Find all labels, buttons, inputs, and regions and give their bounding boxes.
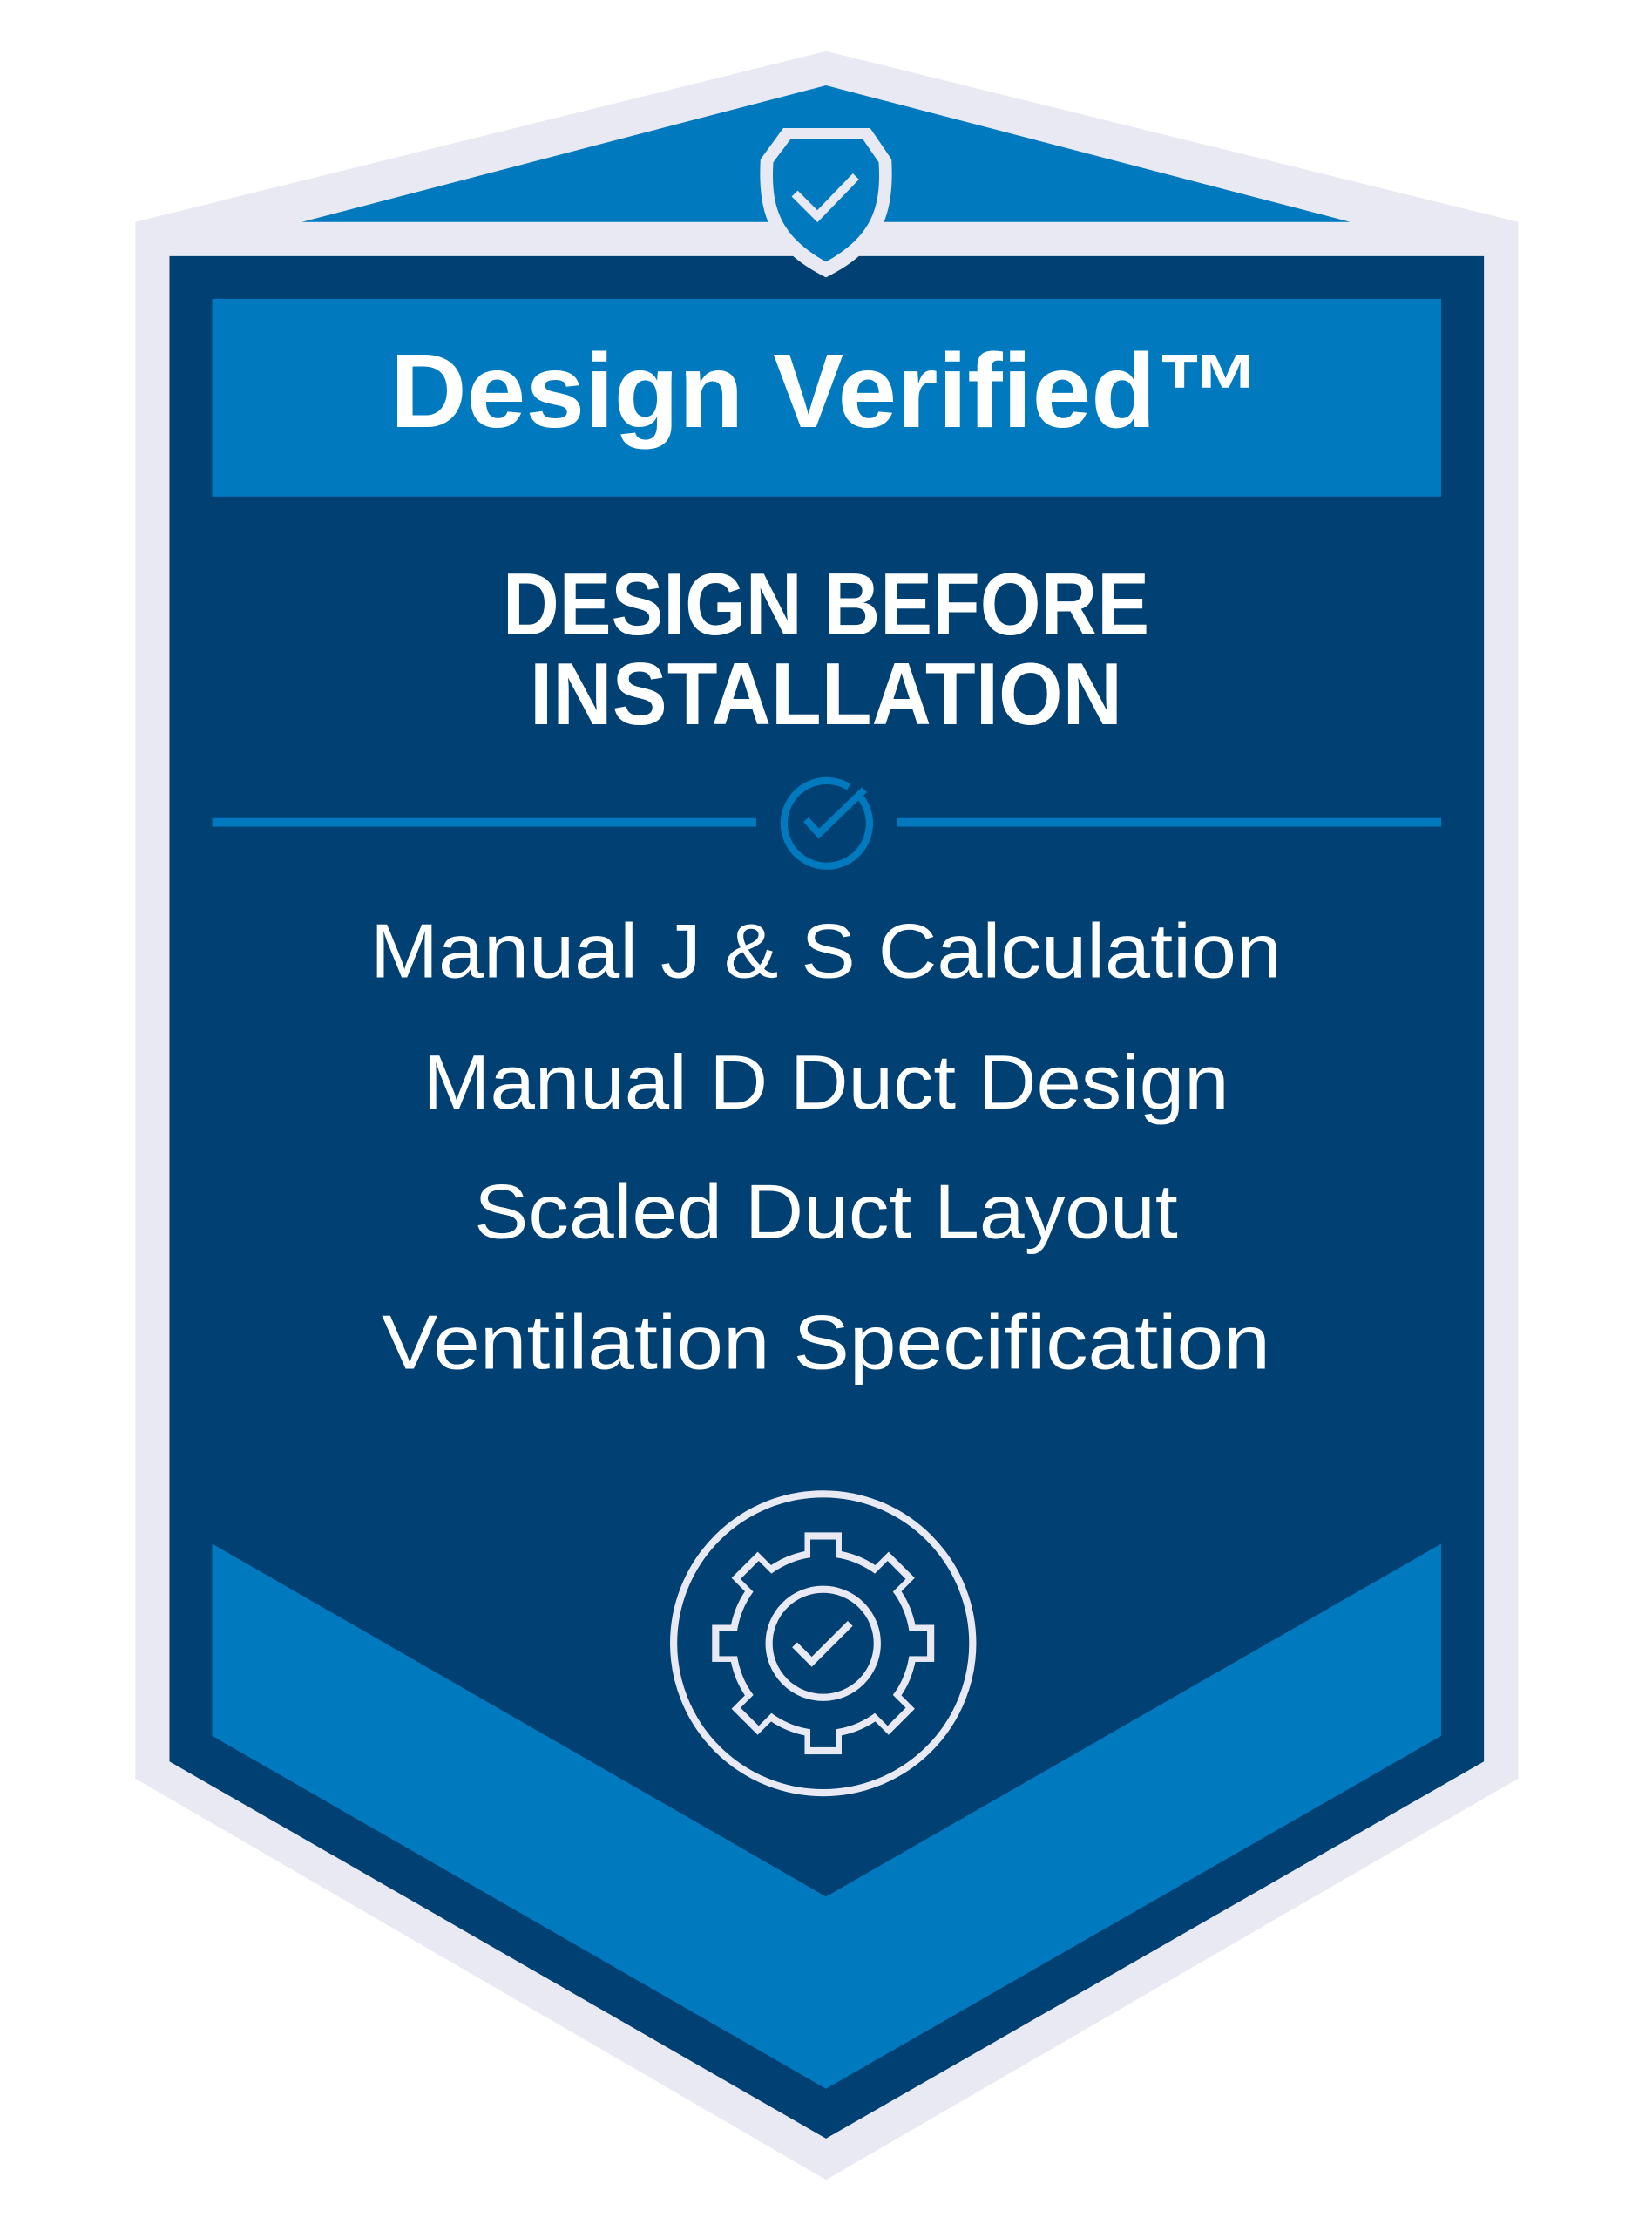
divider with check icon: [213, 781, 1441, 866]
feature list: [370, 908, 1282, 1386]
dark panel: [170, 256, 1484, 2139]
lower chevron band: [213, 1543, 1441, 2089]
feature list: Manual J & S Calculation: [370, 908, 1282, 994]
feature list: Scaled Duct Layout: [474, 1168, 1178, 1254]
title band: [213, 299, 1441, 497]
subtitle: [503, 555, 1149, 743]
feature list: Ventilation Specification: [382, 1299, 1270, 1386]
top blue triangle: [302, 85, 1350, 222]
icon: gear with check: [674, 1494, 972, 1793]
icon: top shield: [760, 128, 892, 277]
subtitle: DESIGN BEFORE: [503, 555, 1149, 654]
subtitle: INSTALLATION: [530, 645, 1122, 743]
badge outer frame: [135, 51, 1518, 2180]
title: Design Verified™: [390, 332, 1262, 450]
feature list: Manual D Duct Design: [423, 1039, 1229, 1125]
